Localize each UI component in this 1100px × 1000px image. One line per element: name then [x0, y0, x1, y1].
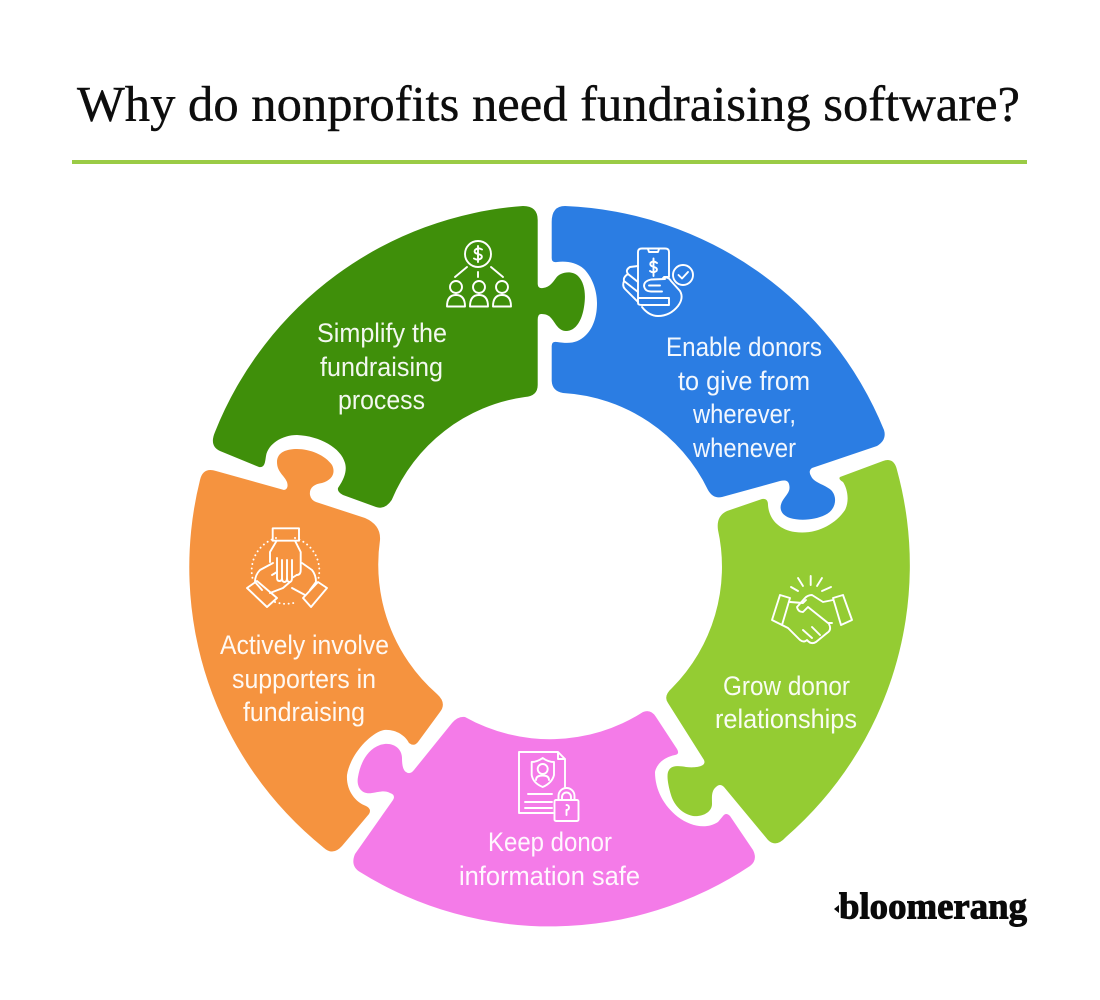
- label: actively involve: supporters in: [232, 664, 376, 694]
- icon: secure document with lock: [519, 752, 578, 821]
- label: enable donors: to give from: [678, 366, 810, 396]
- label: simplify: process: [338, 385, 425, 415]
- label: grow donor: [715, 671, 857, 734]
- icon: three joined hands: [247, 528, 327, 607]
- panel: keep donor information safe: [353, 711, 755, 926]
- label: simplify: Simplify the: [317, 318, 447, 348]
- label: simplify: [317, 318, 447, 415]
- panel: simplify the fundraising process: [213, 206, 585, 508]
- label: grow donor: Grow donor: [723, 671, 850, 701]
- label: keep donor: [459, 827, 640, 891]
- label: enable donors: whenever: [692, 433, 796, 463]
- icon: handshake: [772, 576, 852, 643]
- label: grow donor: relationships: [715, 704, 857, 734]
- label: actively involve: [220, 630, 389, 727]
- label: enable donors: Enable donors: [666, 332, 822, 362]
- panel: actively involve supporters: [189, 449, 443, 852]
- title: Why do nonprofits need fundraising software?: [77, 76, 1020, 132]
- label: simplify: fundraising: [320, 352, 443, 382]
- label: enable donors: [666, 332, 822, 463]
- label: keep donor: Keep donor: [488, 827, 612, 857]
- logo: bloomerang: bloomerang: [839, 886, 1027, 928]
- label: actively involve: fundraising: [243, 697, 365, 727]
- label: actively involve: Actively involve: [220, 630, 389, 660]
- icon: donation to group of people: [447, 241, 511, 306]
- label: keep donor: information safe: [459, 861, 640, 891]
- icon: hand holding phone: [623, 248, 693, 316]
- panel: enable donors to give: [552, 206, 885, 520]
- label: enable donors: wherever,: [692, 399, 796, 429]
- panel: grow donor relationships: [666, 460, 910, 843]
